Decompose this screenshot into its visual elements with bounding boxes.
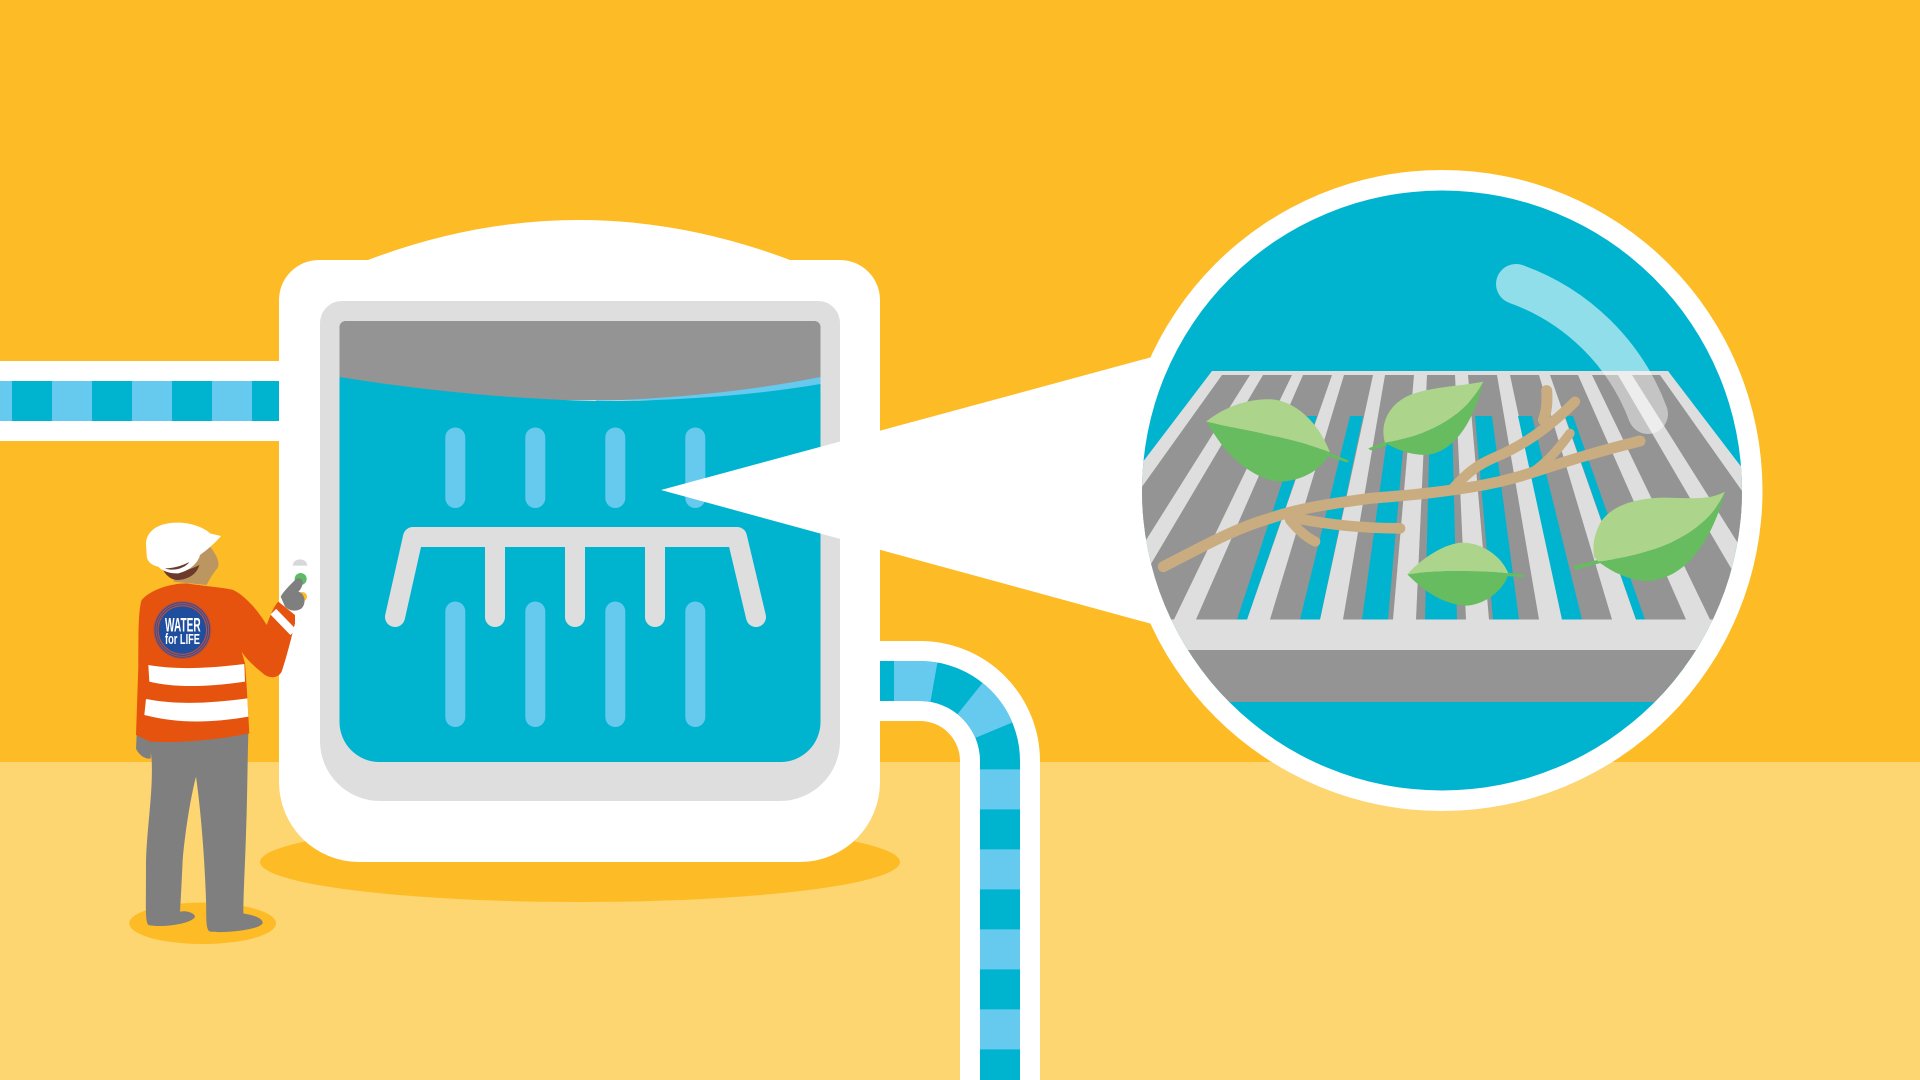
outlet pipe: [870, 681, 1000, 1080]
magnifier beam: [661, 357, 1152, 624]
lens white ring: [1122, 170, 1762, 811]
worker floor shadow: [129, 903, 276, 944]
reflective stripe upper: [148, 664, 245, 686]
leaf: right: [1573, 492, 1725, 581]
control light: amber: [298, 592, 307, 601]
glove pointing at button: [281, 578, 305, 611]
inlet pipe: [0, 361, 285, 441]
leaf: upper middle: [1368, 382, 1483, 455]
background wall: [0, 0, 1920, 762]
screen front edge: [1188, 650, 1696, 702]
twig: [1163, 391, 1640, 567]
water for life badge: WATER: [165, 616, 201, 637]
water for life badge: [153, 601, 211, 659]
tank outer shell: [279, 220, 880, 862]
grey slots: [1142, 375, 1742, 620]
screen frame: [1142, 371, 1742, 650]
hat strap: [165, 562, 189, 570]
lens water background: [1142, 190, 1742, 790]
filter rack: [395, 537, 756, 617]
hair: [163, 565, 199, 580]
control light: grey: [293, 559, 307, 566]
water flow lines above filter: [455, 438, 695, 498]
water flow lines below filter: [455, 612, 695, 717]
worker: [129, 523, 307, 944]
tank floor shadow: [260, 822, 900, 902]
water: [340, 377, 820, 762]
water for life badge: for LIFE: [165, 632, 200, 648]
water visible through slots: [1237, 416, 1645, 620]
tank grey wall: [320, 301, 840, 801]
tank: [279, 220, 880, 862]
trousers: [146, 733, 263, 932]
filter screen close-up: [1142, 371, 1742, 702]
neck and face: [173, 547, 219, 585]
hard hat: [146, 523, 221, 573]
orange jacket: [136, 583, 295, 742]
jacket cuff stripe: [273, 612, 293, 632]
leaf: upper left: [1206, 399, 1349, 482]
control light: green: [295, 573, 307, 585]
left glove: [136, 735, 152, 759]
reflective stripe lower: [144, 698, 248, 721]
lens highlight over screen: [1602, 371, 1668, 434]
tank air space: [340, 321, 820, 400]
lens highlight upper part: [1516, 284, 1648, 414]
leaf: lower middle: [1407, 543, 1524, 606]
floor: [0, 762, 1920, 1080]
water surface highlight: [596, 377, 820, 401]
magnifier lens: [1142, 170, 1762, 811]
